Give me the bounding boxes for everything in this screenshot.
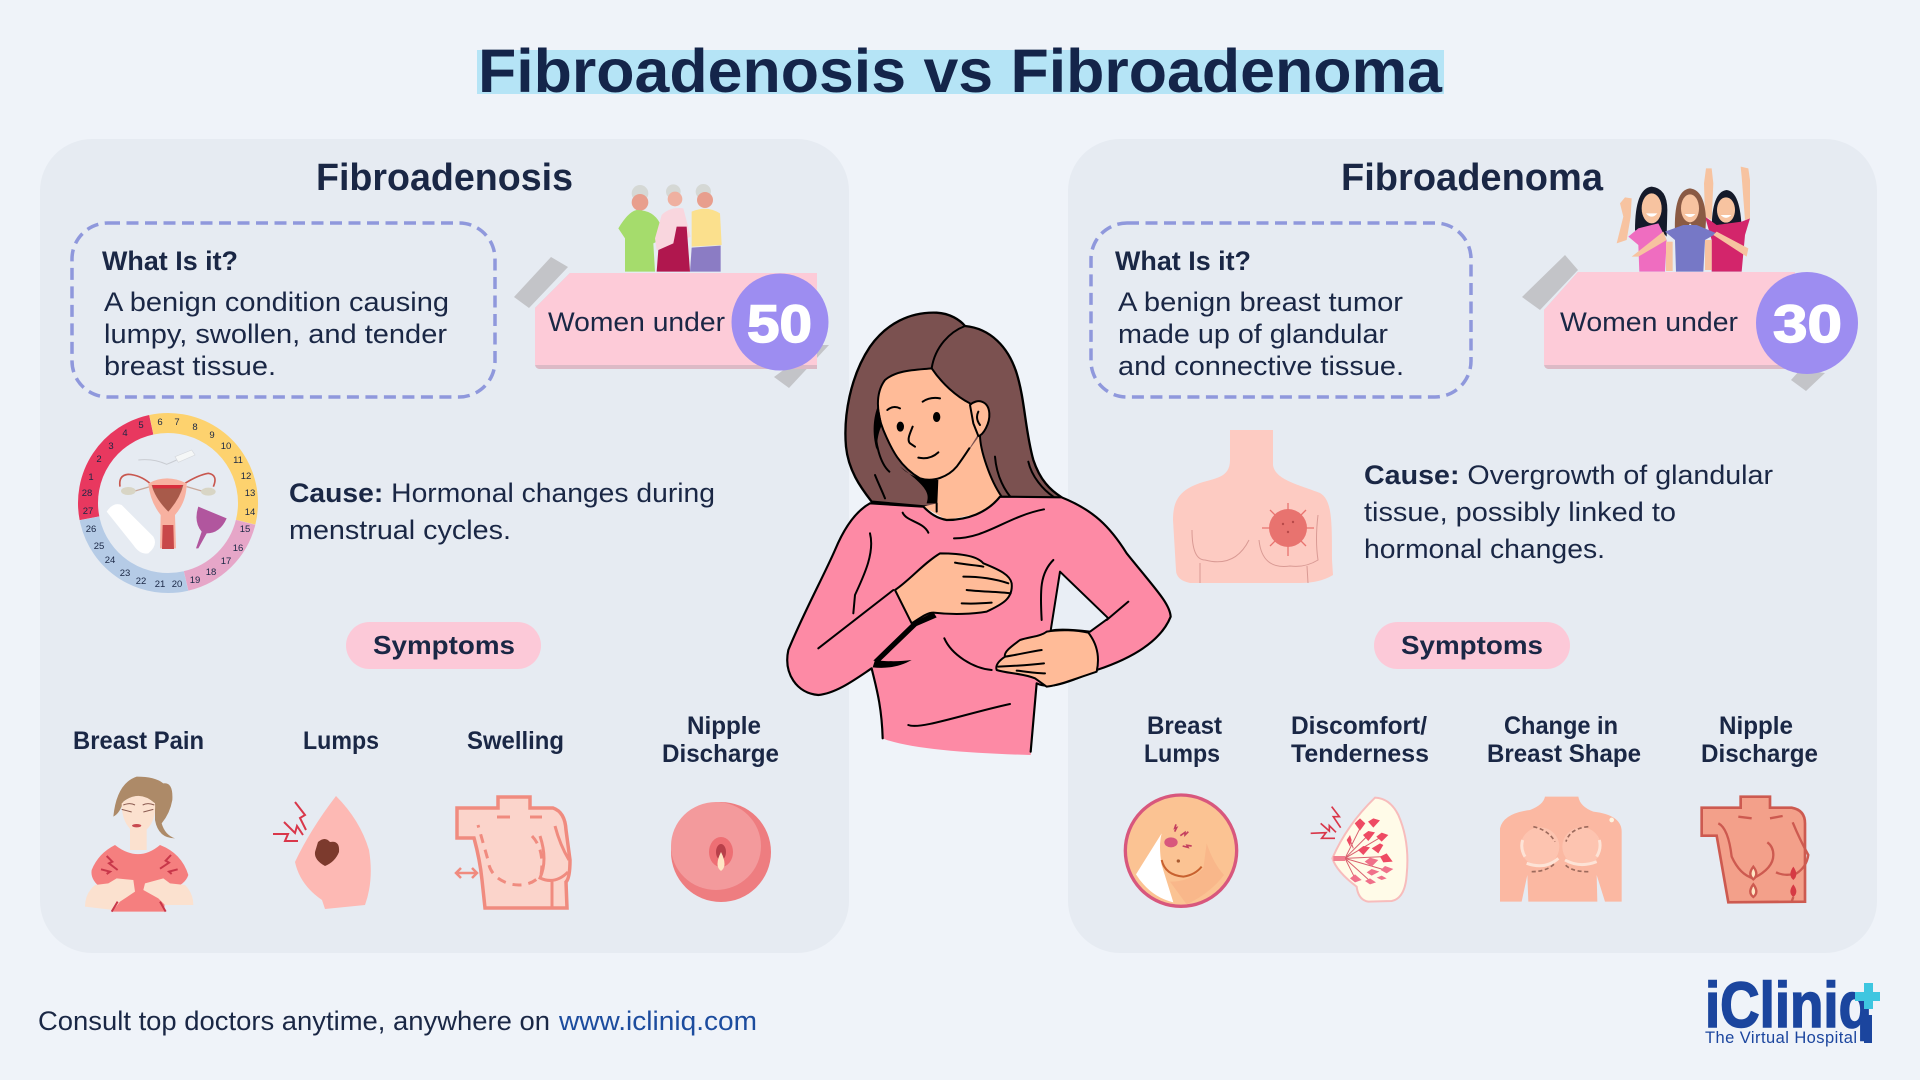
symptom: nipple discharge: Nipple (1719, 712, 1793, 740)
symptoms pill (346, 622, 541, 669)
symptom: breast lumps (1125, 712, 1237, 906)
menstrual cycle wheel: 1 (88, 472, 94, 483)
menstrual cycle wheel: 27 (83, 506, 93, 517)
menstrual cycle wheel: 25 (94, 541, 104, 552)
logo: iCliniq: iCliniq (1705, 969, 1872, 1041)
symptom: breast lumps: Breast (1147, 712, 1223, 740)
age ribbon: women under 50: 50 (747, 295, 812, 354)
illustration: young women (1617, 167, 1750, 272)
neck shadow (900, 467, 938, 503)
menstrual cycle wheel: 7 (174, 417, 180, 428)
symptoms pill (1374, 622, 1570, 669)
cause text: tissue, possibly linked to (1364, 497, 1676, 527)
footer call to action: www.icliniq.com (558, 1006, 757, 1036)
menstrual cycle wheel: 21 (155, 579, 165, 590)
symptom: lumps (273, 727, 379, 909)
menstrual cycle wheel: 28 (82, 488, 92, 499)
footer call to action (38, 1006, 757, 1036)
symptom: swelling: Swelling (467, 727, 564, 755)
logo: iCliniq: The Virtual Hospital (1705, 1029, 1857, 1047)
menstrual cycle wheel: 10 (221, 441, 231, 452)
what is it box: A benign breast tumor (1118, 287, 1403, 317)
menstrual cycle wheel: 26 (86, 524, 96, 535)
facial features (875, 326, 1053, 500)
central woman illustration (787, 313, 1171, 755)
symptom: change in breast shape: Breast Shape (1487, 740, 1641, 768)
ear (970, 401, 989, 436)
hand upper (895, 553, 1012, 623)
cause text (1364, 460, 1773, 564)
panel: fibroadenosis (40, 139, 849, 953)
face (878, 368, 978, 480)
age ribbon: women under 30 (1522, 255, 1858, 391)
menstrual cycle wheel: 12 (241, 471, 251, 482)
illustration: older women (618, 184, 722, 272)
what is it box: made up of glandular (1118, 319, 1388, 349)
what is it box: What Is it? (1115, 246, 1251, 276)
sweater (787, 497, 1171, 755)
age ribbon: women under 30: 30 (1773, 295, 1842, 354)
menstrual cycle wheel: 3 (108, 441, 114, 452)
what is it box: What Is it? (102, 246, 238, 276)
symptom: lumps: Lumps (303, 727, 379, 755)
menstrual cycle wheel: 24 (105, 555, 115, 566)
sweater outline (787, 497, 1171, 752)
heading: fibroadenoma: Fibroadenoma (1341, 157, 1604, 199)
age ribbon: women under 50: Women under (548, 307, 725, 337)
cause text (289, 478, 715, 545)
upper hand fingers (955, 563, 1011, 604)
menstrual cycle wheel: 18 (206, 567, 216, 578)
menstrual cycle wheel: 22 (136, 576, 146, 587)
symptom: nipple discharge: Nipple (687, 712, 761, 740)
menstrual cycle wheel: 20 (172, 579, 182, 590)
menstrual cycle wheel: 19 (190, 575, 200, 586)
symptom: swelling (456, 727, 570, 908)
symptom: discomfort / tenderness: Discomfort/ (1291, 712, 1427, 740)
face outline (878, 368, 1002, 497)
footer call to action: Consult top doctors anytime, anywhere on (38, 1006, 550, 1036)
symptom: change in breast shape: Change in (1504, 712, 1618, 740)
cause text: hormonal changes. (1364, 534, 1605, 564)
cause text: Cause: Overgrowth of glandular (1364, 460, 1773, 490)
what is it box: and connective tissue. (1118, 351, 1404, 381)
menstrual cycle wheel (71, 406, 265, 600)
hair (845, 313, 1062, 507)
neck line (934, 503, 940, 512)
lower hand fingers (998, 650, 1045, 673)
menstrual cycle wheel: 14 (245, 507, 255, 518)
menstrual cycle wheel: 23 (120, 568, 130, 579)
menstrual cycle wheel: 5 (138, 420, 144, 431)
symptom: breast pain: Breast Pain (73, 727, 204, 755)
breast tumor illustration (1173, 430, 1333, 583)
cause text: menstrual cycles. (289, 515, 511, 545)
menstrual cycle wheel: 6 (157, 417, 163, 428)
symptoms pill: Symptoms (1401, 630, 1543, 660)
menstrual cycle wheel: 2 (96, 454, 102, 465)
menstrual cycle wheel: 9 (209, 430, 215, 441)
menstrual cycle wheel: 8 (192, 422, 198, 433)
symptom: discomfort / tenderness (1291, 712, 1429, 902)
symptom: nipple discharge: Discharge (662, 740, 779, 768)
symptom: discomfort / tenderness: Tenderness (1291, 740, 1429, 768)
symptom: nipple discharge (662, 712, 779, 902)
what is it box (1091, 223, 1471, 397)
menstrual cycle wheel: 11 (233, 455, 243, 466)
symptom: change in breast shape (1487, 712, 1641, 902)
hand lower (996, 630, 1098, 687)
what is it box: lumpy, swollen, and tender (104, 319, 447, 349)
cause text: Cause: Hormonal changes during (289, 478, 715, 508)
what is it box (72, 223, 495, 397)
heading: fibroadenosis: Fibroadenosis (316, 157, 573, 199)
menstrual cycle wheel: 16 (233, 543, 243, 554)
menstrual cycle wheel: 17 (221, 556, 231, 567)
arm gap (1051, 572, 1108, 632)
neck (923, 435, 1002, 520)
face hair shadow (874, 405, 882, 450)
symptom: nipple discharge: Discharge (1701, 740, 1818, 768)
menstrual cycle wheel: 15 (240, 524, 250, 535)
symptom: breast pain (73, 727, 204, 912)
sweater creases (818, 509, 1128, 726)
symptom: nipple discharge (1701, 712, 1818, 902)
what is it box: breast tissue. (104, 351, 276, 381)
symptom: breast lumps: Lumps (1144, 740, 1220, 768)
age ribbon: women under 30: Women under (1560, 307, 1738, 337)
title: Fibroadenosis vs Fibroadenoma (478, 37, 1443, 105)
menstrual cycle wheel: 13 (245, 488, 255, 499)
age ribbon: women under 50 (514, 257, 829, 388)
panel: fibroadenoma (1068, 139, 1877, 953)
menstrual cycle wheel: 4 (122, 428, 128, 439)
symptoms pill: Symptoms (373, 630, 515, 660)
arm shadow (873, 612, 937, 668)
what is it box: A benign condition causing (104, 287, 449, 317)
